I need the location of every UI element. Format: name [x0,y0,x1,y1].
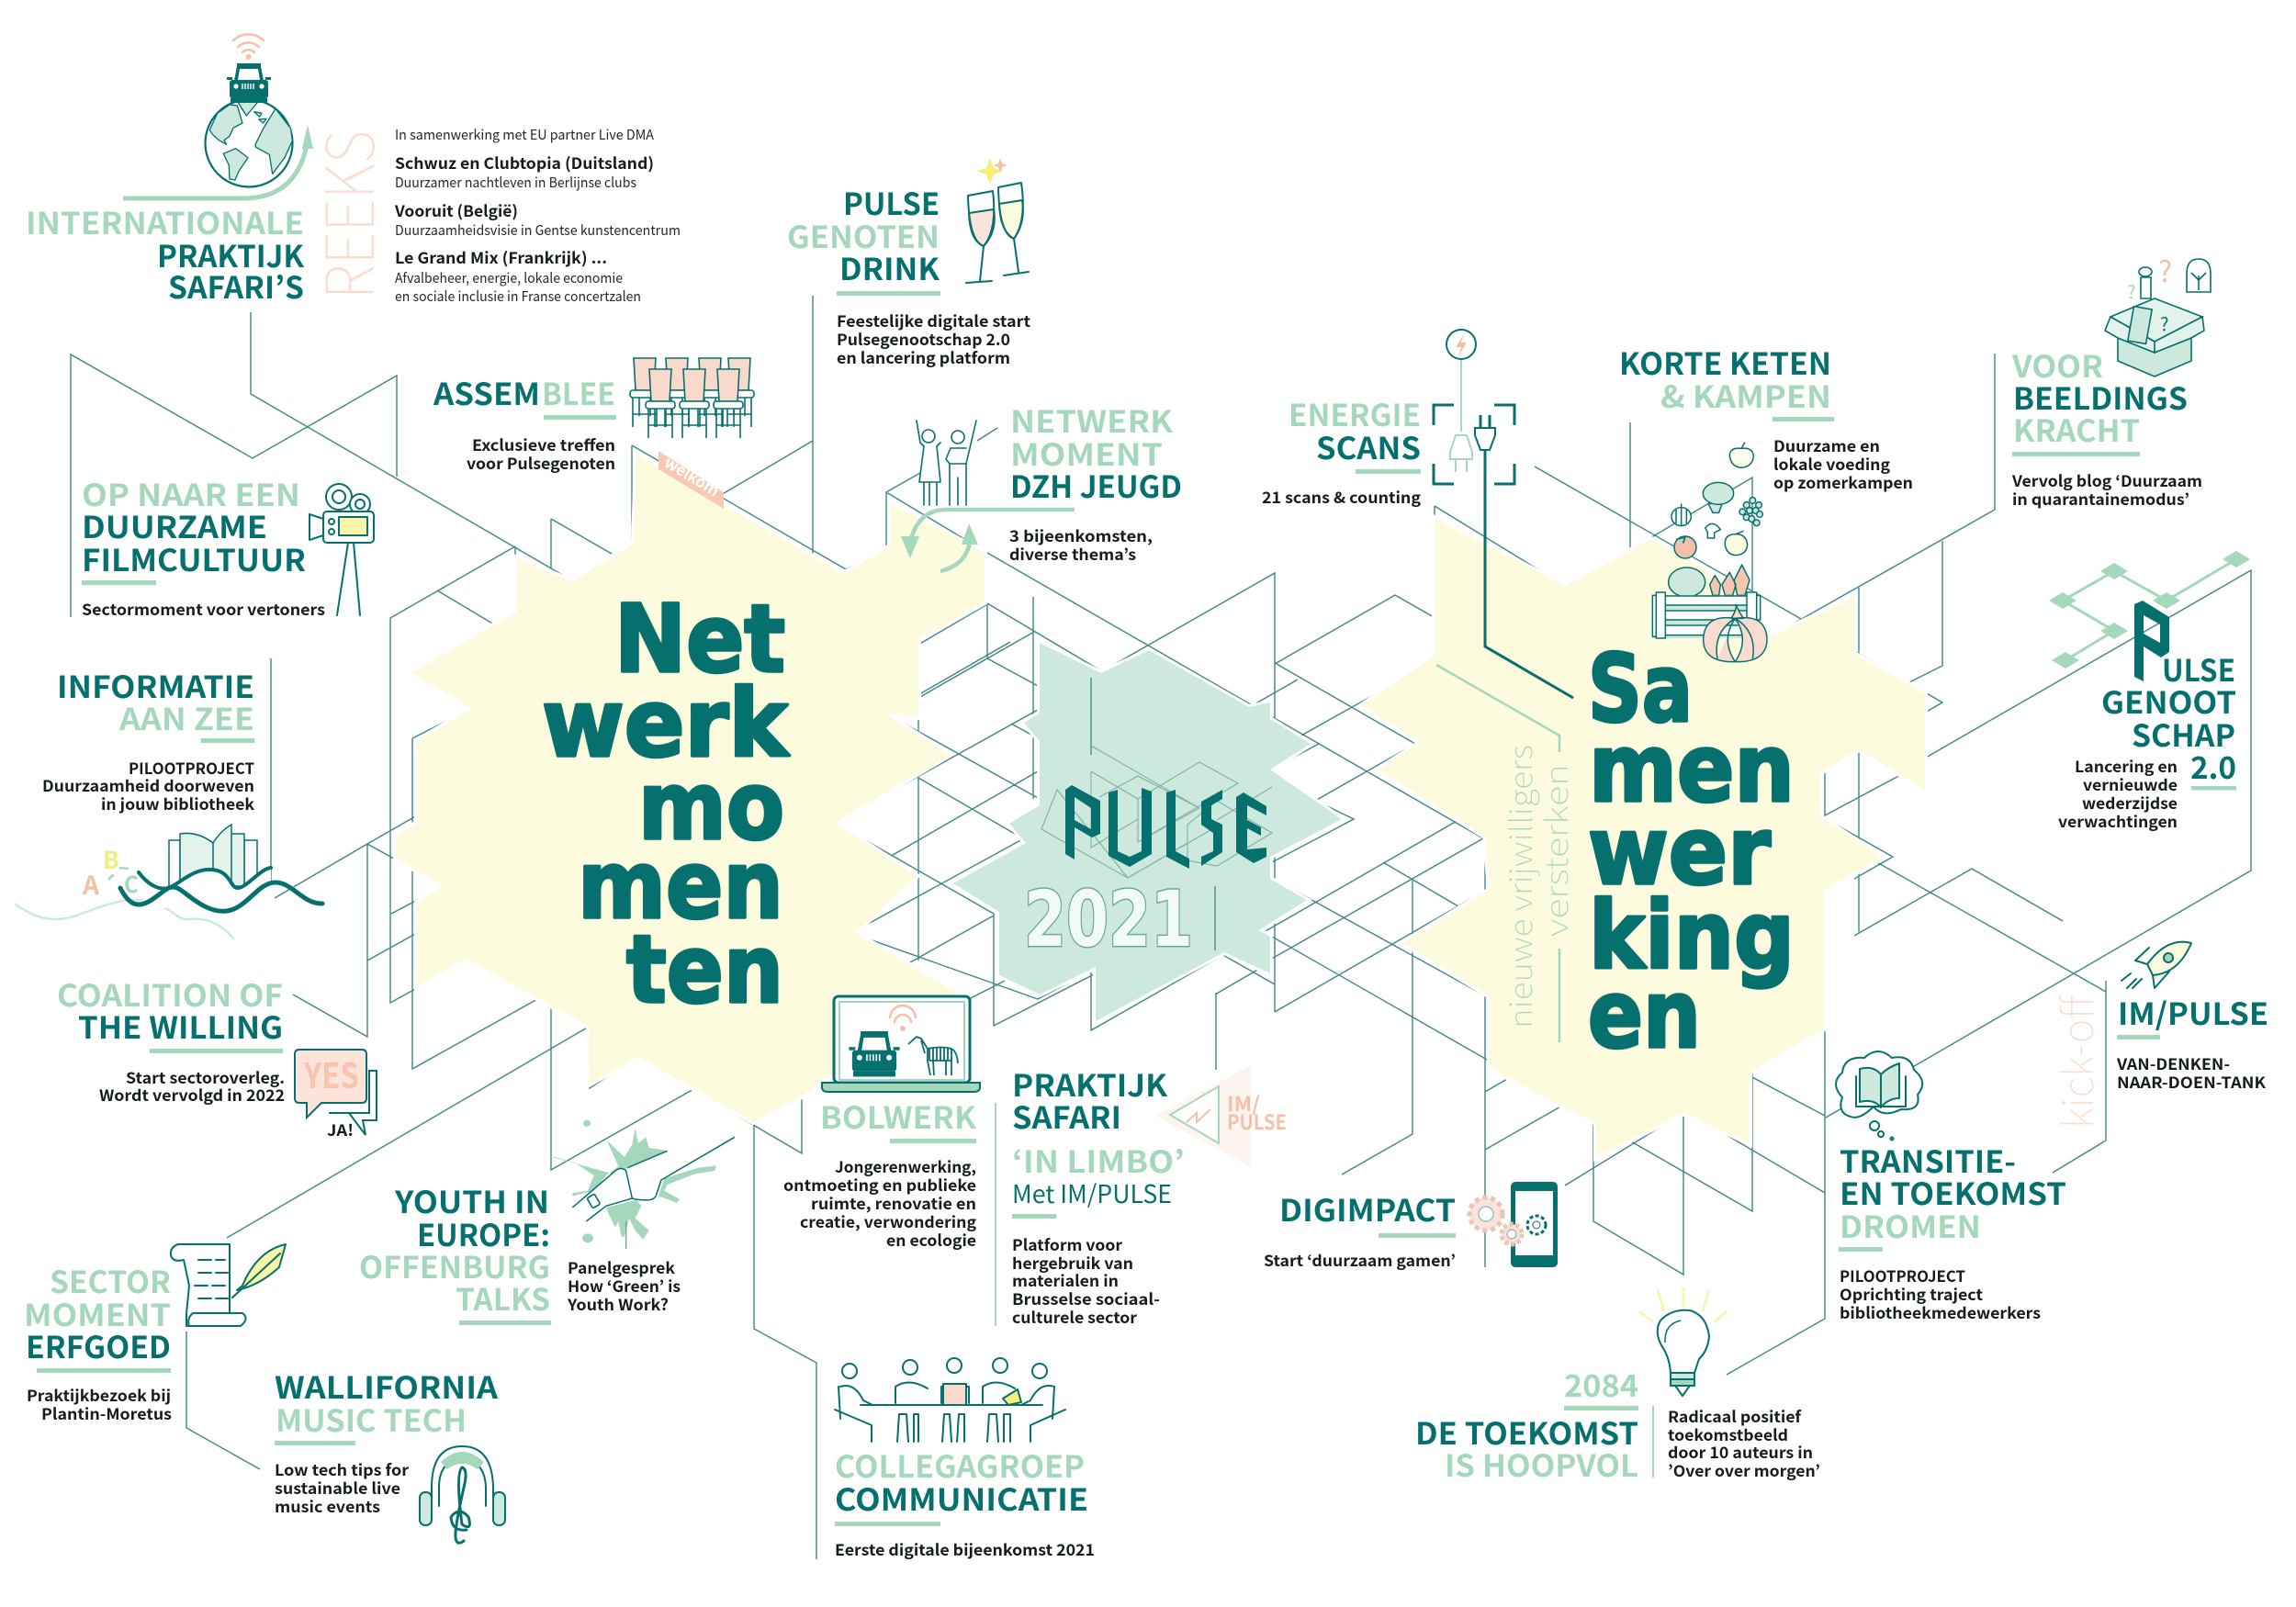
centre logo: Pulse 2021 [1024,678,1272,964]
heading [1415,1362,1638,1486]
heading: ULSE [2162,646,2235,691]
heading [24,1258,171,1373]
heading: DUURZAME [82,503,267,547]
heading: TALKS [456,1275,550,1320]
heading: ASSEM [433,370,540,414]
icon: IM/PULSE tag: PULSE [1227,1107,1287,1136]
heading: THE WILLING [78,1004,283,1048]
text block: partner list: Le Grand Mix (Frankrijk) ... [395,245,607,268]
icon: laptop with jeep and zebra [822,996,980,1092]
heading: TRANSITIE- [1840,1138,2016,1182]
icon: open box: ? [2127,277,2135,304]
icon: speech bubbles YES / JA: YES [303,1048,359,1098]
heading [1839,1138,2066,1252]
heading [835,1443,1088,1526]
panel: Korte keten en kampen [1619,340,1913,662]
text block [567,1255,681,1315]
text block: in quarantainemodus’ [2012,487,2189,510]
text block: partner list: Schwuz en Clubtopia (Duitsland) [395,151,654,174]
text block [275,1457,410,1517]
heading: COALITION OF [57,972,283,1016]
panel: Voorbeeldingskracht [2011,249,2211,510]
text block: Lancering en [2075,754,2178,777]
text block: op zomerkampen [1773,470,1913,493]
text block: Feestelijke digitale start [837,309,1030,332]
text block: partner list: Afvalbeheer, energie, lokale economie [395,268,623,287]
icon: film camera [310,484,374,615]
text block: Wordt vervolgd in 2022 [99,1083,285,1106]
text block: lokale voeding [1773,452,1890,475]
panel: Wallifornia music tech [275,1364,505,1543]
heading [359,1178,551,1325]
panel: Energiescans [1262,330,1573,698]
panel: Sectormoment erfgoed [24,1244,286,1469]
text block: Platform voor [1012,1232,1123,1255]
text block: Radicaal positief [1668,1404,1802,1427]
text block: Vervolg blog ‘Duurzaam [2011,468,2202,491]
heading: Met IM/PULSE [1012,1174,1172,1210]
text block [2011,468,2202,510]
text block [1840,1264,2041,1323]
heading [82,471,306,585]
panel: Praktijk safari in limbo [996,1062,1287,1328]
heading: YOUTH IN [394,1178,549,1222]
heading: BEELDINGS [2013,375,2188,419]
text block: Praktijkbezoek bij [27,1383,171,1406]
divider line [1652,1406,1654,1478]
text block: Start ‘duurzaam gamen’ [1264,1248,1456,1271]
heading: 2.0 [2190,744,2236,788]
text block: door 10 auteurs in [1668,1440,1813,1463]
heading: SECTOR [50,1258,171,1302]
heading: ENERGIE [1289,391,1421,435]
heading: BOLWERK [820,1094,976,1138]
heading: PULSE [843,180,940,224]
heading: OFFENBURG [359,1243,550,1287]
panel: Netwerkmoment DZH Jeugd [901,398,1182,571]
icon: speech bubbles YES / JA [295,1048,377,1141]
title: Samenwerkingen: king [1589,882,1795,991]
text block [1668,1404,1820,1481]
text block [783,1154,976,1251]
text block: Pulsegenootschap 2.0 [837,327,1010,350]
text block: partner list: Duurzaamheidsvisie in Gentse kunstencentrum [395,220,681,240]
heading: COMMUNICATIE [835,1476,1088,1520]
text block: NAAR-DOEN-TANK [2117,1070,2266,1093]
heading [57,972,283,1053]
text block [467,433,615,474]
heading [1010,398,1182,507]
heading: & KAMPEN [1660,373,1831,417]
heading: SCHAP [2132,712,2235,756]
text block [27,1383,172,1424]
label: REEKS: REEKS [297,130,393,299]
heading: OP NAAR EEN [82,471,300,515]
text block: Oprichting traject [1840,1282,1983,1305]
heading [1012,1062,1185,1219]
title: Netwerkmomenten: werk [542,669,790,779]
heading: INTERNATIONALE [26,199,304,243]
text block: 21 scans & counting [1262,485,1421,508]
callout: nieuwe vrijwilligers versterken: nieuwe vrijwilligers [1497,745,1541,1028]
icon: IM/PULSE tag [1155,1065,1287,1167]
text block: sustainable live [275,1476,400,1499]
text block [2116,1051,2266,1093]
heading: SAFARI’S [168,264,304,308]
text block [1773,433,1913,493]
icon: thought cloud with book [1836,1051,1922,1141]
text block [837,309,1030,368]
icon: champagne glasses [966,158,1029,283]
heading: DROMEN [1840,1203,1981,1247]
heading: KRACHT [2013,407,2140,451]
panel: Youth in Europe [359,1120,735,1325]
icon: light bulb [1639,1287,1727,1396]
text block: Sectormoment voor vertoners [82,597,325,620]
text block: Duurzame en [1773,433,1880,456]
text block: bibliotheekmedewerkers [1840,1300,2041,1323]
icon: open box: ? [2160,309,2168,336]
text block: verwachtingen [2058,809,2178,832]
heading [57,663,254,743]
panel: Pulsegenotendrink [787,158,1030,368]
text block: Brusselse sociaal- [1012,1287,1160,1309]
text block: music events [275,1494,380,1517]
label: kick-off: kick-off [2045,994,2106,1129]
tag: welkom: welkom [660,450,725,500]
text block: PILOOTPROJECT [1840,1264,1965,1287]
icon: rocket [2122,942,2191,988]
heading: GENOOT [2101,679,2236,723]
panel: Digimpact [1264,1182,1558,1271]
panel: Op naar een duurzame filmcultuur [82,471,374,620]
icon: phone and gears [1469,1182,1558,1267]
icon: headphones with clef [420,1446,505,1543]
text block: Low tech tips for [275,1457,410,1480]
heading: BLEE [542,370,615,414]
heading: GENOTEN [787,213,940,257]
icon: book on waves with letters: C [124,867,139,899]
background grid lines [71,296,2251,1559]
text block: ruimte, renovatie en [811,1191,976,1214]
heading: PRAKTIJK [157,232,304,276]
icon: paint splash with fist bump [544,1120,735,1249]
heading: IS HOOPVOL [1445,1442,1638,1486]
text block: Panelgesprek [568,1255,676,1278]
panel: Coalition of the willing [57,972,377,1141]
icon: plug scan [1434,330,1573,698]
icon: chairs [630,358,754,438]
heading [2011,343,2188,456]
callout: nieuwe vrijwilligers versterken [1436,665,1577,1042]
panel: Collegagroep communicatie [835,1358,1095,1560]
title: Samenwerkingen: men [1589,714,1795,824]
title: Netwerkmomenten [542,585,790,1025]
heading: WALLIFORNIA [275,1364,499,1408]
icon: book on waves with letters [15,825,322,939]
text block: ’Over over morgen’ [1668,1458,1820,1481]
heading: EN TOEKOMST [1840,1170,2066,1214]
text block: materialen in [1012,1268,1119,1291]
heading: AAN ZEE [118,695,254,739]
heading [433,370,616,420]
2021: 2021 [1024,874,1193,964]
heading: SAFARI [1012,1094,1121,1138]
heading: 2084 [1564,1362,1638,1406]
icon: vegetables and crate [1652,443,1767,662]
title: Netwerkmomenten: Net [614,585,785,694]
heading: KORTE KETEN [1619,340,1831,384]
text block: partner list [394,125,681,306]
text block: partner list: Duurzamer nachtleven in Berlijnse clubs [395,173,636,192]
heading [1619,340,1834,421]
heading: FILMCULTUUR [82,536,306,580]
text block: partner list: In samenwerking met EU partner Live DMA [395,125,655,144]
heading: NETWERK [1010,398,1173,442]
text block: vernieuwde [2083,772,2178,795]
panel: Pulsegenootschap 2.0 [2049,551,2250,832]
icon: book on waves with letters: B [103,842,119,876]
text block: How ‘Green’ is [568,1274,681,1297]
heading: DIGIMPACT [1279,1186,1456,1231]
connector line [186,1332,260,1469]
text block [1012,1232,1160,1328]
text block: culturele sector [1012,1305,1138,1328]
icon: open box [2105,249,2211,376]
text block: creatie, verwondering [800,1209,976,1232]
text block: en ecologie [886,1228,976,1251]
heading: EUROPE: [417,1211,550,1255]
text block: Youth Work? [567,1292,669,1315]
panel: Informatie aan zee [15,663,322,939]
text block: 3 bijeenkomsten, [1009,523,1153,546]
panel: De toekomst is hoopvol [1415,1287,1820,1486]
panel: Transitie- en toekomstdromen [1836,1051,2066,1323]
title: Samenwerkingen: Sa [1588,635,1693,744]
text block [99,1065,285,1106]
heading: DE TOEKOMST [1415,1410,1638,1454]
text block: toekomstbeeld [1668,1422,1788,1445]
panel: Internationale praktijk safari's [26,34,681,308]
heading: MUSIC TECH [276,1397,467,1441]
text block: ontmoeting en publieke [783,1173,976,1196]
icon: speech bubbles YES / JA: JA! [327,1118,354,1141]
icon: open box: ? [2158,249,2172,291]
panel: IM/PULSE [2045,942,2268,1129]
green shape: Pulse 2021 [953,643,1342,1021]
icon: wifi signal [233,34,264,60]
text block [42,756,255,815]
heading: MOMENT [24,1291,171,1335]
text block: Plantin-Moretus [41,1401,172,1424]
heading: MOMENT [1010,431,1163,475]
icon: people around a table [835,1358,1065,1442]
yellow shape: Samenwerkingen [1362,518,1925,1157]
icon: scroll and quill [171,1244,286,1326]
text block: Start sectoroverleg. [126,1065,285,1088]
icon: Pulse P [2134,601,2169,681]
heading: VOOR [2011,343,2103,387]
heading [1289,391,1421,474]
text block [1009,523,1153,565]
text block: PILOOTPROJECT [129,756,254,779]
heading [2101,646,2236,790]
heading: COLLEGAGROEP [835,1443,1085,1487]
yellow shape: Netwerkmomenten [396,455,985,1122]
text block: VAN-DENKEN- [2116,1051,2230,1074]
panel: Assemblee [433,358,754,474]
heading [26,199,304,308]
panel: Bolwerk [783,996,980,1251]
text block: wederzijdse [2082,791,2178,814]
icon: IM/PULSE tag: IM/ [1227,1088,1260,1118]
title: Samenwerkingen: en [1588,961,1701,1070]
text block: Duurzaamheid doorweven [42,773,254,796]
icon: two people waving [917,421,976,505]
heading: INFORMATIE [57,663,254,707]
text block: diverse thema’s [1009,542,1136,565]
text block: partner list: Vooruit (België) [394,198,518,221]
text block: voor Pulsegenoten [467,451,615,474]
heading: ‘IN LIMBO’ [1012,1138,1185,1182]
heading: PRAKTIJK [1012,1062,1167,1106]
icon: network diamonds [2049,551,2250,669]
icon: cycle arrows [901,510,1075,571]
icon: globe with jeep [206,63,292,187]
heading: DRINK [839,245,940,289]
title: Netwerkmomenten: men [578,831,783,940]
heading: ERFGOED [26,1323,171,1367]
text block: partner list: en sociale inclusie in Franse concertzalen [395,287,641,306]
title: Samenwerkingen [1588,635,1795,1070]
heading: IM/PULSE [2118,990,2268,1034]
icon: growth arrow [123,125,313,198]
text block: Jongerenwerking, [835,1154,976,1177]
heading [275,1364,499,1445]
heading [787,180,940,296]
text block: Eerste digitale bijeenkomst 2021 [835,1537,1095,1560]
heading: SCANS [1316,424,1421,468]
heading: DZH JEUGD [1010,463,1182,507]
callout: nieuwe vrijwilligers versterken: versterken [1533,764,1577,937]
title: Netwerkmomenten: mo [638,752,784,861]
text block: in jouw bibliotheek [101,792,255,815]
icon: book on waves with letters: A [82,866,100,903]
text block [2058,754,2178,832]
title: Netwerkmomenten: ten [626,916,783,1025]
text block: hergebruik van [1012,1251,1133,1274]
text block: en lancering platform [837,345,1010,368]
title: Samenwerkingen: wer [1588,797,1771,906]
text block: Exclusieve treffen [472,433,615,455]
divider line [995,1103,996,1326]
PULSE letters [1065,785,1266,869]
